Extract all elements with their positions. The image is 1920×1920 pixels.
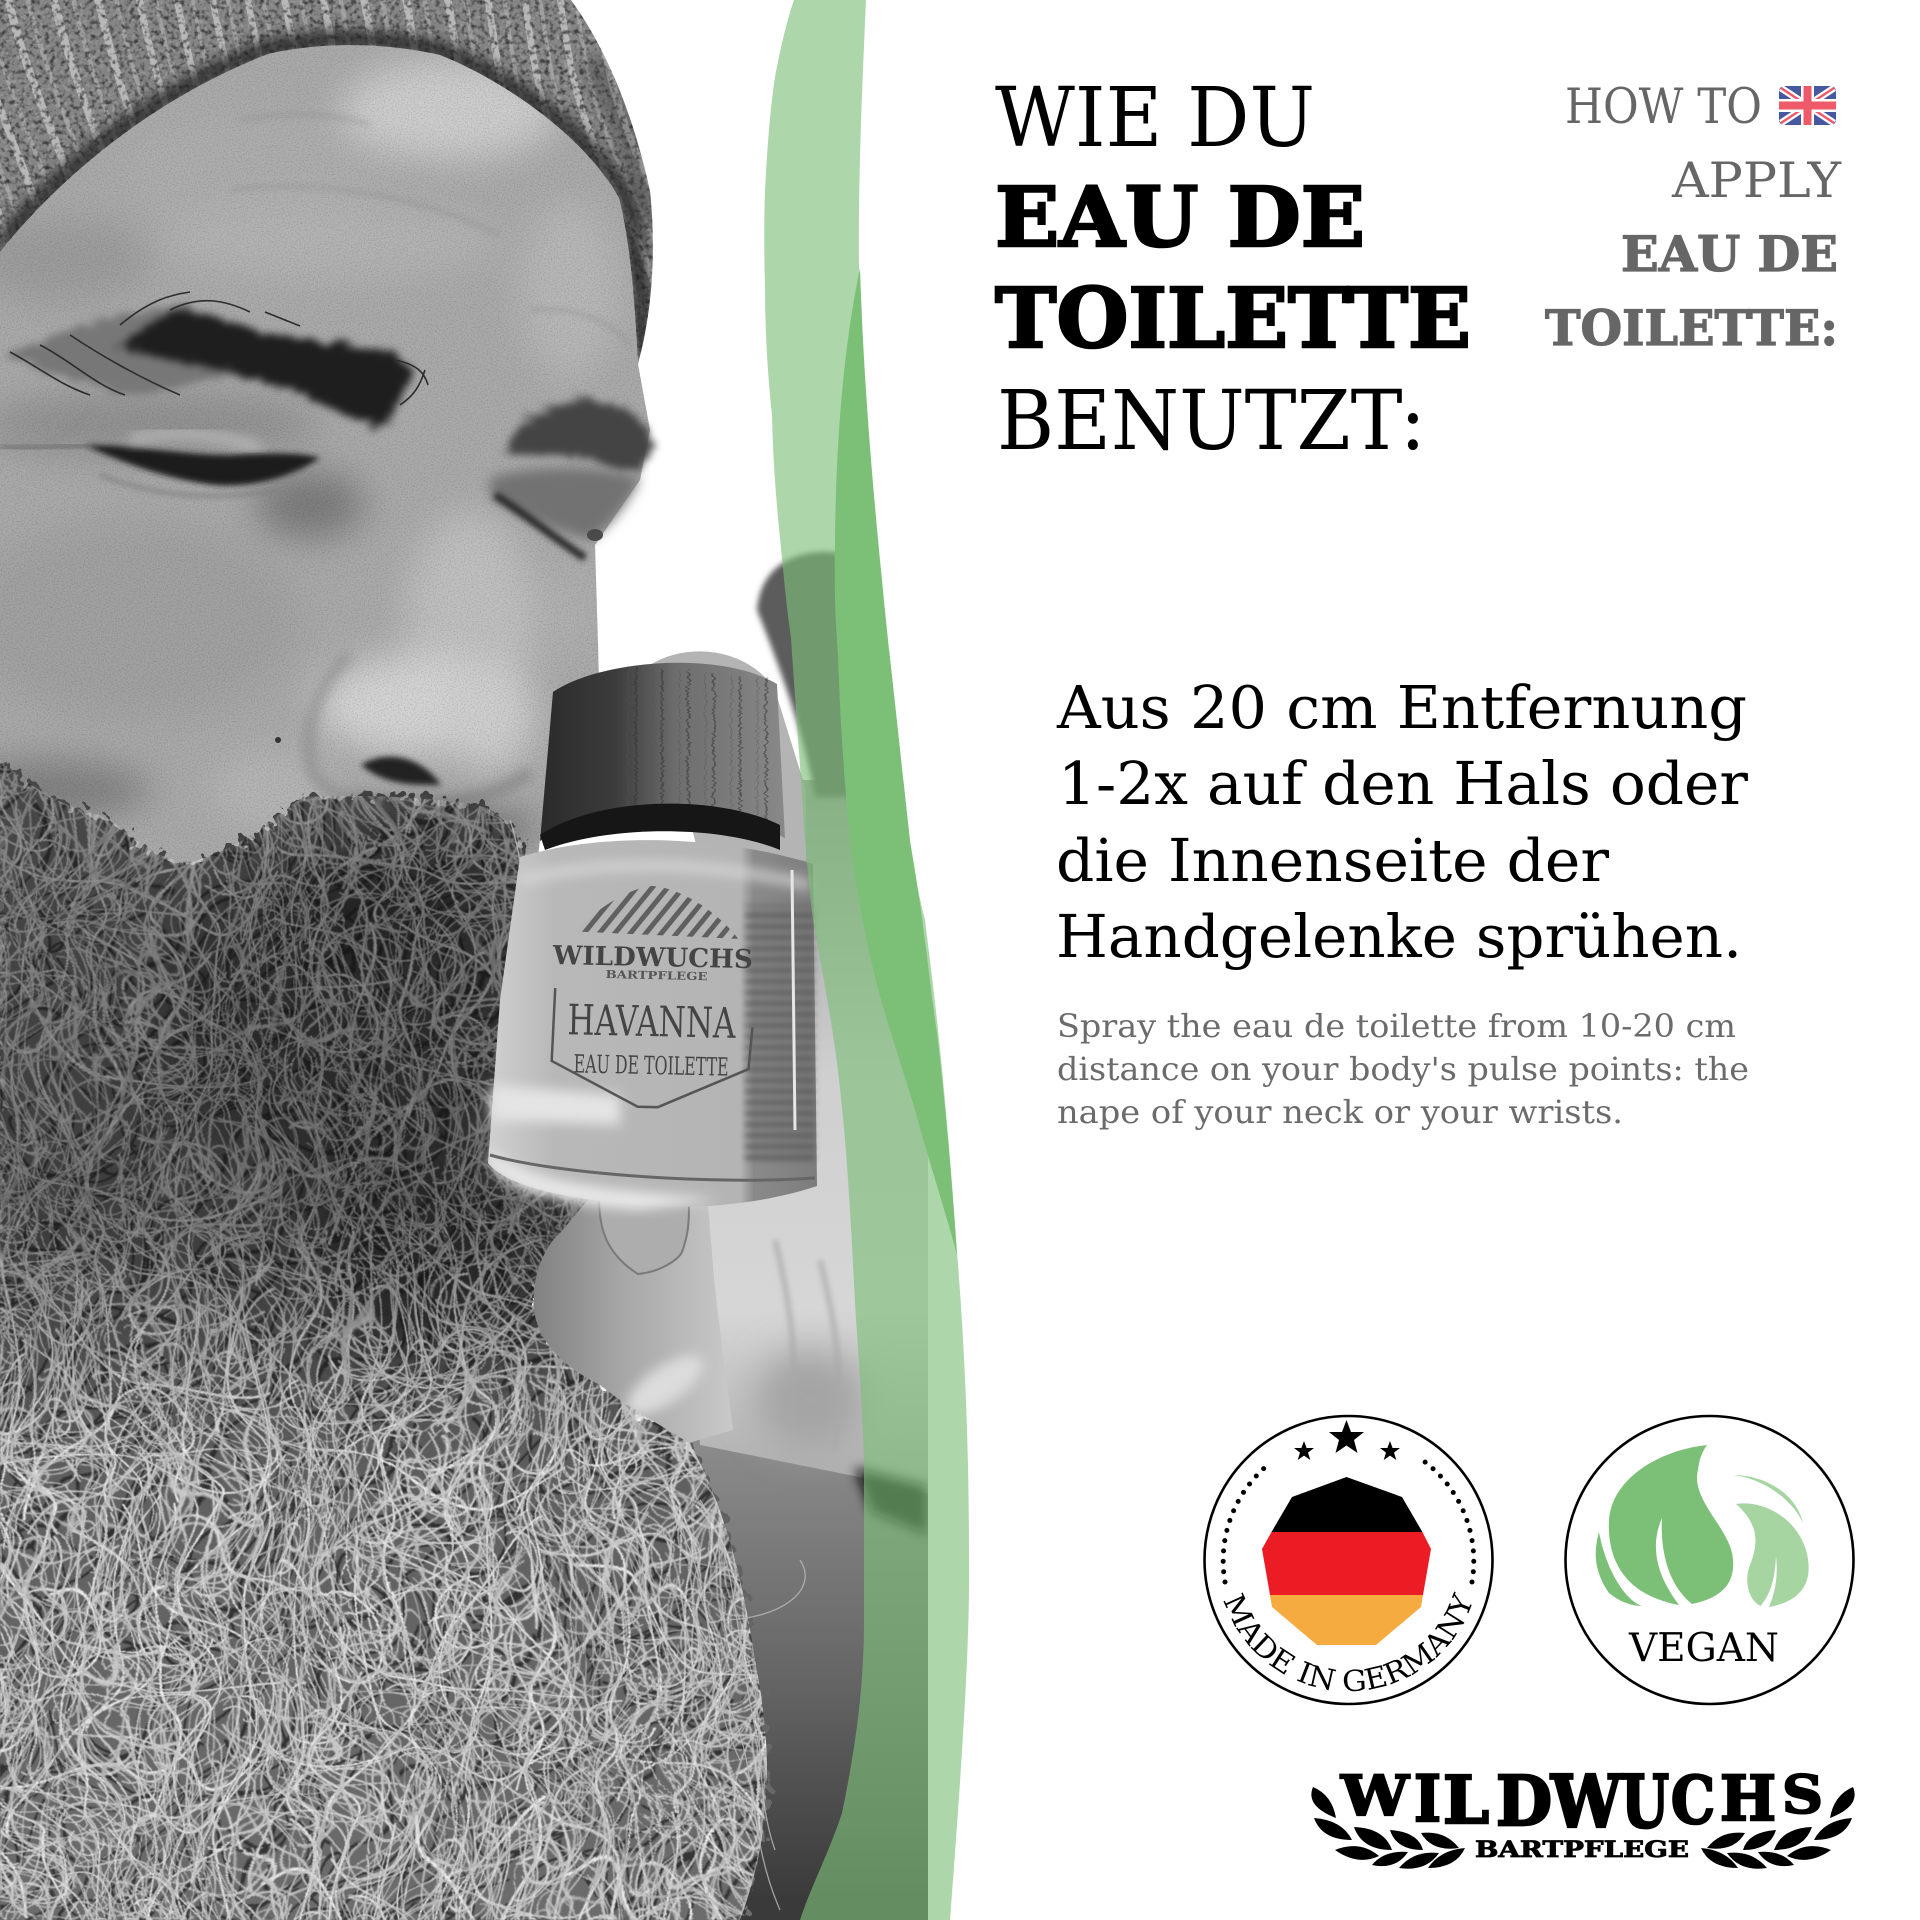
badge: Made in Germany xyxy=(1203,1414,1494,1706)
title line: TOILETTE: TOILETTE xyxy=(995,271,1471,367)
logo wordmark: C xyxy=(1671,1762,1715,1839)
photo: bottle cap xyxy=(540,663,785,850)
photo: fingers behind the bottle xyxy=(650,552,900,860)
photo: beard base mass xyxy=(0,700,900,1920)
badge text: MADE IN GERMANY: MADE IN GERMANY xyxy=(1224,1592,1472,1692)
logo wordmark xyxy=(1340,1761,1823,1845)
logo left laurel xyxy=(1311,1787,1465,1869)
photo: cap bottom ring xyxy=(540,804,780,850)
logo wordmark: D xyxy=(1496,1761,1552,1842)
translation line 3: nape of your neck or your wrists. xyxy=(1057,1093,1623,1131)
photo: thumb xyxy=(534,1178,733,1443)
English line: APPLY: APPLY xyxy=(1671,152,1842,209)
photo: right eyebrow xyxy=(505,400,652,471)
instruction line 3: die Innenseite der xyxy=(1056,826,1610,895)
logo wordmark: I xyxy=(1414,1762,1441,1837)
photo: beard edge backing xyxy=(0,790,725,1920)
photo: nose underside shadow xyxy=(350,772,530,805)
icon: small leaf xyxy=(1734,1475,1809,1607)
photo: forehead wrinkles xyxy=(0,115,630,444)
logo right laurel xyxy=(1701,1787,1855,1869)
photo: label type: EAU DE TOILETTE xyxy=(573,1049,729,1082)
photo: nose crease xyxy=(308,655,350,800)
photo: beard xyxy=(0,760,776,1920)
photo: bearded man smelling a perfume bottle xyxy=(0,0,928,1920)
logo wordmark: W xyxy=(1340,1764,1410,1829)
logo wordmark: S xyxy=(1782,1764,1823,1826)
photo: face xyxy=(0,45,661,866)
photo: dark curly hair xyxy=(0,640,900,1920)
photo: eyebrow hairs xyxy=(10,292,428,405)
text block: German instructions xyxy=(1056,673,1749,971)
photo: left closed eye xyxy=(0,434,320,496)
photo: nostril xyxy=(361,757,441,785)
title line: WIE DU: WIE DU xyxy=(995,71,1315,166)
photo: hand and arm behind the bottle xyxy=(650,552,928,1920)
text block: English instructions xyxy=(1057,1007,1749,1131)
badge: Vegan xyxy=(1566,1416,1854,1704)
logo subtitle: BARTPFLEGE xyxy=(1475,1837,1689,1863)
photo: facial shading xyxy=(0,46,650,864)
photo: left eyebrow xyxy=(7,292,428,427)
decoration: dotted arcs xyxy=(1223,1462,1474,1582)
photo: bottle label xyxy=(549,884,755,1109)
photo: mole xyxy=(275,737,281,743)
logo wordmark: H xyxy=(1720,1762,1776,1835)
English line: HOW TO: HOW TO xyxy=(1565,78,1762,135)
instruction line 1: Aus 20 cm Entfernung xyxy=(1056,673,1747,742)
photo: arm and shoulder xyxy=(660,1400,928,1920)
title: German heading xyxy=(995,71,1471,469)
photo: right closed eye socket xyxy=(490,468,640,558)
photo: label frame xyxy=(551,988,753,1109)
icon: German flag octagon xyxy=(1262,1477,1431,1645)
photo: hand shading xyxy=(755,1240,928,1535)
icon: large leaf xyxy=(1596,1445,1733,1606)
English line: TOILETTE: TOILETTE: xyxy=(1545,299,1838,357)
instruction line 4: Handgelenke sprühen. xyxy=(1056,902,1742,971)
title line: BENUTZT: BENUTZT: xyxy=(997,374,1426,469)
English line: EAU DE: EAU DE xyxy=(1621,225,1838,283)
photo: glass bottle xyxy=(488,840,817,1210)
title line: EAU DE: EAU DE xyxy=(995,170,1365,266)
photo: label brand: WILDWUCHS xyxy=(552,941,753,975)
photo: palm of the hand xyxy=(680,780,928,1494)
photo: label dome xyxy=(574,884,739,939)
photo: light curly hair xyxy=(0,640,900,1920)
instruction line 2: 1-2x auf den Hals oder xyxy=(1058,749,1749,818)
icon: three stars xyxy=(1294,1420,1400,1460)
title: English heading xyxy=(1545,78,1842,357)
graphic: solid green wave xyxy=(835,268,957,1255)
photo: skin grain xyxy=(0,46,650,864)
photo: knit beanie xyxy=(0,0,653,364)
photo: thumbnail xyxy=(599,1181,689,1274)
logo wordmark: W xyxy=(1550,1761,1624,1845)
photo: beanie shadow edge xyxy=(0,39,642,360)
logo: Wildwuchs Bartpflege xyxy=(1311,1761,1855,1869)
photo: beard hair strands xyxy=(0,640,900,1920)
photo: stray hairs xyxy=(510,820,805,1910)
graphic: translucent light green wave xyxy=(764,0,969,1920)
badge text: VEGAN: VEGAN xyxy=(1628,1626,1779,1671)
photo: label subbrand: BARTPFLEGE xyxy=(605,968,708,983)
translation line 1: Spray the eau de toilette from 10-20 cm xyxy=(1057,1007,1736,1045)
logo wordmark: U xyxy=(1621,1761,1669,1845)
translation line 2: distance on your body's pulse points: the xyxy=(1057,1050,1749,1088)
photo: label scent: HAVANNA xyxy=(567,995,737,1048)
logo wordmark: L xyxy=(1443,1762,1489,1839)
photo: bottle reflections xyxy=(488,866,810,1210)
icon: UK flag xyxy=(1779,86,1836,125)
